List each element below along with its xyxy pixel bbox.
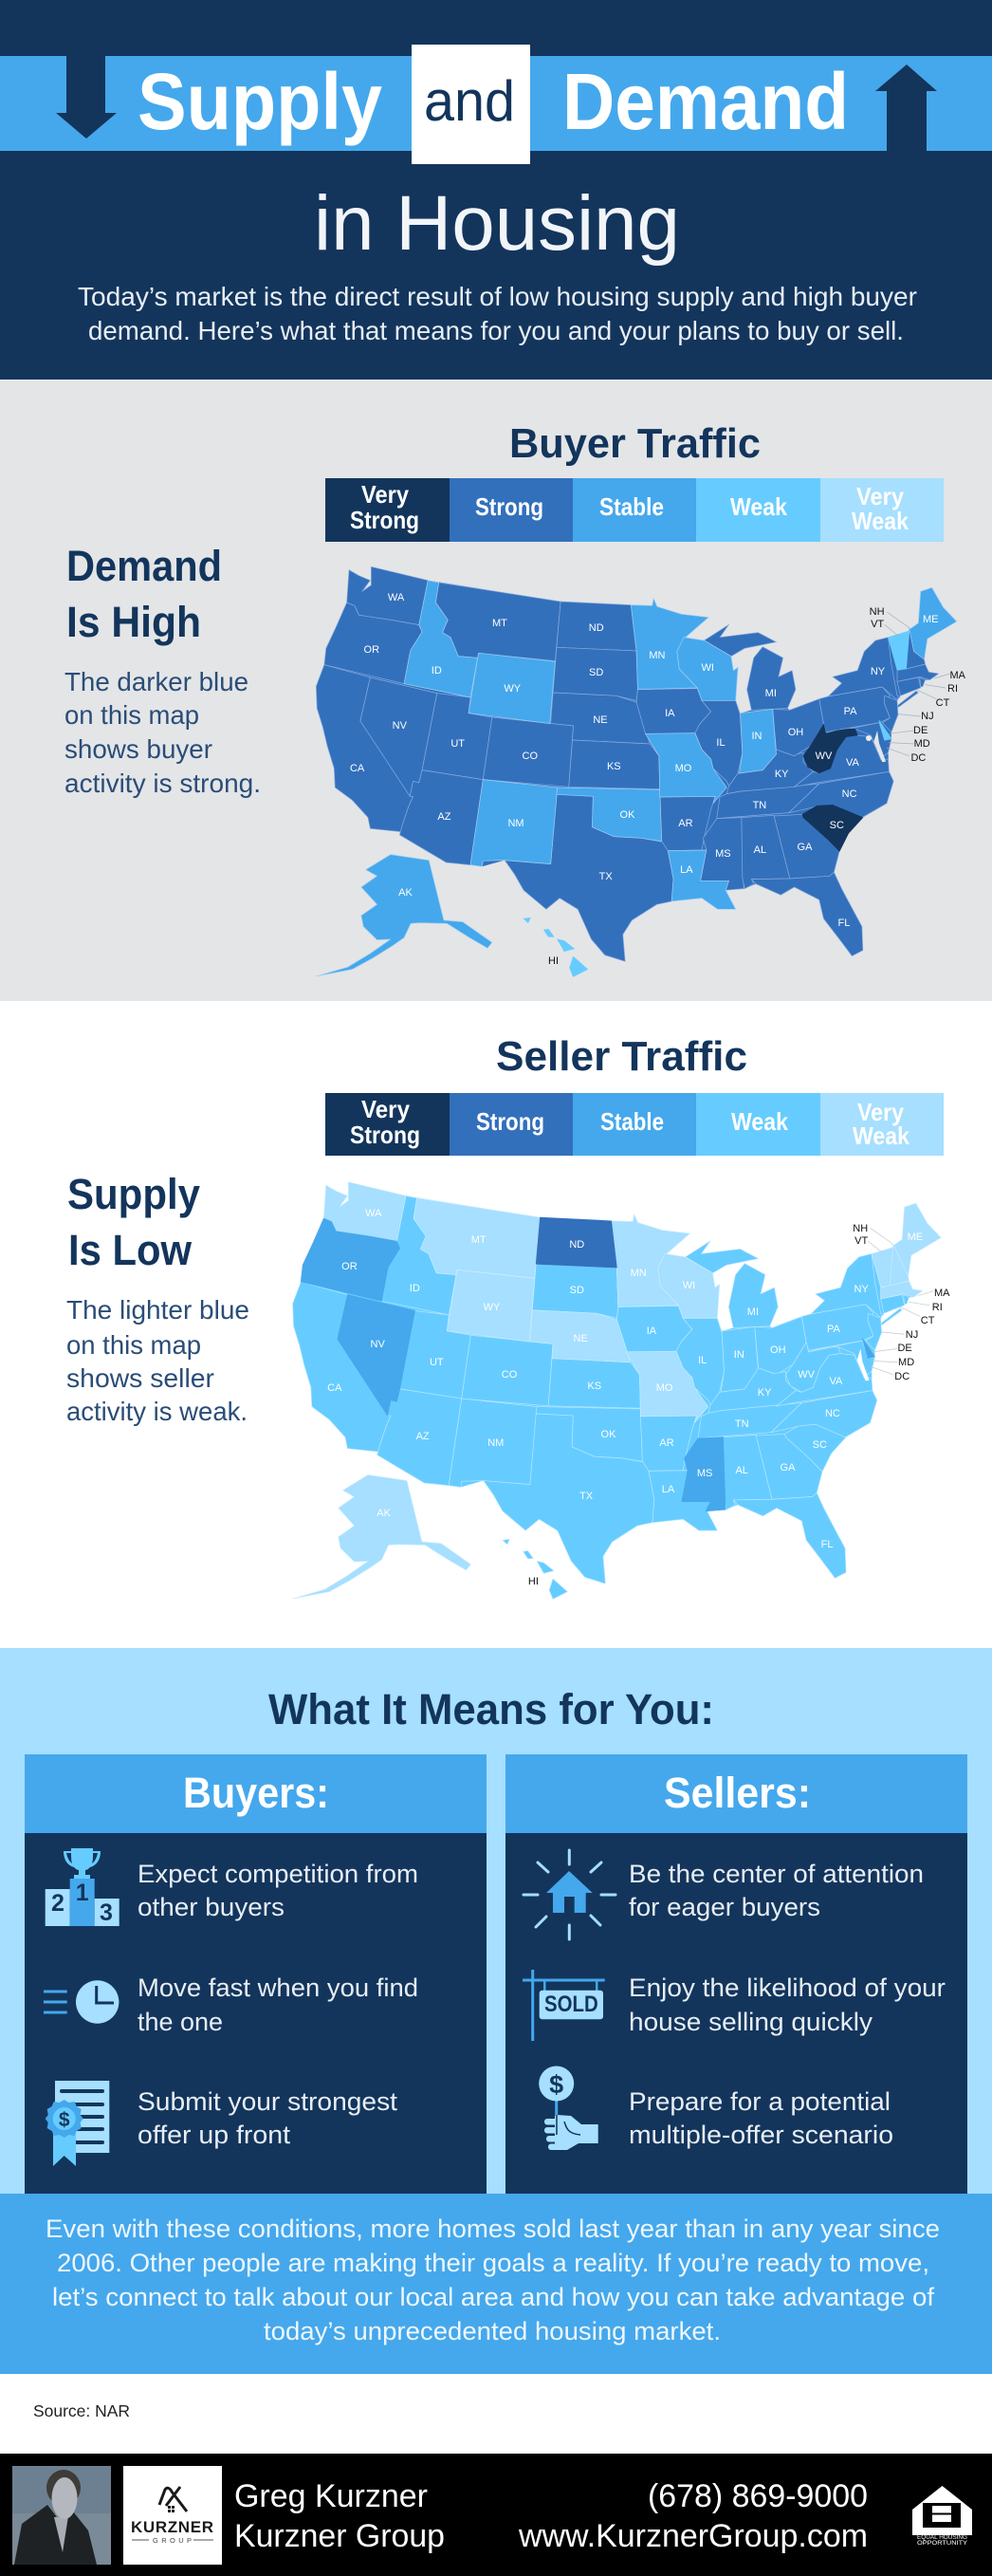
logo wordmark: KURZNER [131, 2518, 213, 2536]
icon: offer document with badge: $ [59, 2109, 70, 2131]
external state labels: seller map: NH [853, 1223, 868, 1234]
icon: trophy on podium: 3 [100, 1900, 113, 1926]
state labels: buyer map: TN [753, 800, 766, 811]
legend: seller traffic [325, 1093, 944, 1156]
agent photo [12, 2466, 111, 2565]
state labels: buyer map: LA [680, 864, 693, 876]
external state labels: seller map: CT [921, 1315, 935, 1326]
state labels: seller map: MN [631, 1268, 647, 1279]
text: buyers item 1 [138, 1860, 418, 1921]
text: demand description [64, 667, 261, 798]
state labels: buyer map: KY [775, 769, 789, 780]
icon: trophy on podium: 1 [76, 1880, 89, 1906]
text: closing paragraph: 2006. Other people are making their goals a reality. If you’re ready to move, [57, 2249, 929, 2277]
title: Supply: Supply [138, 57, 382, 146]
company logo [123, 2466, 222, 2565]
text: sellers item 3: Prepare for a potential [629, 2087, 891, 2116]
panel: buyers [25, 1754, 487, 2194]
legend: seller traffic: Weak [731, 1107, 788, 1136]
heading: Buyers: Buyers: [183, 1769, 329, 1817]
text: supply description [66, 1295, 249, 1426]
title: and: and [424, 69, 515, 133]
state labels: buyer map: MT [492, 618, 507, 629]
external state labels: buyer map [548, 606, 966, 967]
state labels: buyer map: UT [450, 738, 465, 750]
text: buyers item 3 [138, 2087, 398, 2149]
state labels: seller map: SC [813, 1439, 827, 1451]
text: demand description: on this map [64, 700, 199, 730]
state labels: buyer map: FL [837, 917, 850, 929]
state labels: seller map: SD [570, 1285, 584, 1296]
text: sellers item 1: Be the center of attention [629, 1860, 924, 1888]
logo mark [159, 2487, 187, 2511]
state labels: buyer map: AR [678, 818, 693, 829]
text: closing paragraph: let’s connect to talk about our local area and how you can take advantage of [52, 2283, 934, 2311]
state labels: buyer map: WV [816, 751, 833, 762]
state labels: buyer map: MS [715, 848, 731, 860]
company logo: GROUP [153, 2536, 192, 2545]
state labels: seller map: IL [698, 1355, 707, 1366]
state labels: seller map: UT [430, 1357, 444, 1368]
text: buyers item 1: Expect competition from [138, 1860, 418, 1888]
state labels: buyer map: NV [393, 720, 408, 732]
icon: sold sign [523, 1970, 605, 2041]
source note: Source: NAR [33, 2401, 130, 2420]
state labels: seller map: IN [734, 1349, 744, 1361]
state labels: buyer map: IA [665, 708, 675, 719]
state labels: seller map: LA [662, 1484, 675, 1495]
text: sellers item 2 [629, 1974, 946, 2036]
legend: buyer traffic: Very [361, 480, 409, 509]
text: sellers item 1: for eager buyers [629, 1893, 820, 1921]
icon: offer document with badge [46, 2081, 109, 2166]
icon: equal housing opportunity: EQUAL HOUSING [917, 2534, 967, 2541]
text: buyers item 2: Move fast when you find [138, 1974, 418, 2002]
state labels: buyer map: SC [830, 820, 844, 831]
title: in Housing: in Housing [314, 180, 680, 267]
state labels: buyer map: NY [871, 666, 886, 677]
icon: trophy on podium [46, 1848, 119, 1926]
state labels: buyer map [350, 592, 938, 929]
icon: equal housing opportunity: OPPORTUNITY [917, 2540, 968, 2547]
state labels: seller map: NE [574, 1333, 588, 1344]
agent name: Greg Kurzner [234, 2478, 428, 2514]
contact details: (678) 869-9000 [648, 2478, 868, 2514]
icon: hand holding dollar sign [539, 2066, 598, 2150]
state labels: buyer map: MO [675, 763, 692, 774]
state labels: buyer map: OR [364, 644, 379, 656]
state labels: seller map: CA [327, 1382, 342, 1394]
state labels: seller map: AZ [416, 1431, 430, 1442]
legend: seller traffic: Strong [350, 1121, 420, 1149]
state labels: seller map: TX [579, 1491, 594, 1502]
state labels: buyer map: AK [398, 887, 413, 899]
icon: down arrow [56, 56, 117, 139]
state labels: seller map: ND [569, 1239, 584, 1251]
legend: seller traffic: Weak [853, 1121, 909, 1150]
text: demand description: activity is strong. [64, 769, 261, 798]
legend: seller traffic: Very [361, 1095, 410, 1123]
state labels: buyer map: TX [599, 871, 613, 882]
text: closing paragraph: Even with these conditions, more homes sold last year than in any year since [46, 2215, 940, 2243]
header panel [0, 0, 992, 380]
external state labels: seller map: MD [898, 1357, 914, 1368]
state labels: seller map: AL [735, 1465, 748, 1476]
state labels: seller map: TN [735, 1418, 749, 1430]
external state labels: seller map: DC [894, 1371, 909, 1382]
state labels: buyer map: AL [754, 844, 766, 856]
state labels: buyer map: PA [844, 706, 857, 717]
text: sellers item 3 [629, 2087, 893, 2149]
state labels: buyer map: IN [751, 731, 762, 742]
legend: seller traffic: Stable [600, 1107, 664, 1136]
state labels: seller map: MI [747, 1307, 759, 1318]
heading: Supply Is Low: Supply [67, 1170, 200, 1218]
legend: seller traffic: Very [857, 1098, 904, 1126]
contact details [518, 2478, 868, 2554]
external state labels: seller map: NJ [906, 1329, 918, 1341]
state labels: buyer map: IL [716, 737, 726, 749]
external state labels: buyer map: MD [914, 738, 930, 750]
state labels: seller map: ID [410, 1283, 420, 1294]
state labels: seller map: MT [471, 1234, 487, 1246]
state labels: buyer map: VA [846, 757, 859, 769]
state labels: seller map [327, 1208, 923, 1550]
text: sellers item 3: multiple-offer scenario [629, 2121, 893, 2149]
heading: Sellers: Sellers: [664, 1769, 811, 1817]
state labels: buyer map: WA [388, 592, 405, 603]
panel: demand section [0, 380, 992, 1001]
legend: buyer traffic [325, 478, 944, 542]
legend: buyer traffic: Weak [730, 492, 787, 521]
text: closing paragraph [46, 2215, 940, 2345]
intro text: Today’s market is the direct result of low housing supply and high buyer [78, 282, 917, 311]
state labels: buyer map: AZ [437, 811, 451, 823]
text: demand description: shows buyer [64, 734, 212, 764]
text: supply description: on this map [66, 1330, 201, 1360]
agent name [234, 2478, 445, 2554]
state labels: buyer map: CO [523, 751, 538, 762]
panel: what it means for you [0, 1648, 992, 2194]
external state labels: buyer map: DE [913, 725, 928, 736]
state labels: buyer map: WI [701, 662, 714, 674]
heading: Supply Is Low: Is Low [68, 1226, 193, 1274]
state labels: seller map: WY [484, 1302, 501, 1313]
heading: What It Means for You: What It Means for You: [268, 1685, 714, 1733]
state labels: seller map: KY [758, 1387, 772, 1399]
state labels: seller map: OH [770, 1344, 786, 1356]
legend: seller traffic: Strong [476, 1107, 544, 1136]
heading: Demand Is High [66, 542, 222, 646]
state labels: seller map: ME [908, 1232, 923, 1243]
panel: supply section [0, 1001, 992, 1648]
text: closing paragraph: today’s unprecedented housing market. [264, 2317, 721, 2345]
state labels: buyer map: ME [923, 614, 938, 625]
panel: sellers [505, 1754, 967, 2194]
legend: buyer traffic: Strong [475, 492, 543, 521]
legend: buyer traffic: Strong [350, 506, 419, 534]
text: supply description: shows seller [66, 1363, 214, 1393]
state labels: seller map: IA [647, 1325, 657, 1337]
text: demand description: The darker blue [64, 667, 248, 696]
state labels: seller map: GA [781, 1462, 796, 1473]
text: buyers item 1: other buyers [138, 1893, 285, 1921]
state labels: buyer map: CA [350, 763, 365, 774]
heading: Demand Is High: Is High [66, 598, 201, 646]
text: sellers item 2: Enjoy the likelihood of your [629, 1974, 946, 2002]
text: buyers item 3: offer up front [138, 2121, 291, 2149]
external state labels: buyer map: DC [910, 752, 926, 764]
state labels: buyer map: KS [607, 761, 621, 772]
state labels: buyer map: WY [504, 683, 522, 695]
state labels: seller map: KS [587, 1381, 601, 1392]
heading: Demand Is High: Demand [66, 542, 222, 590]
icon: hand holding dollar sign: $ [549, 2070, 563, 2099]
state labels: seller map: NY [854, 1284, 870, 1295]
state labels: buyer map: NM [507, 818, 524, 829]
title band [0, 56, 992, 151]
external state labels: seller map: VT [854, 1235, 869, 1247]
state labels: seller map: WV [798, 1369, 816, 1381]
icon: sold sign: SOLD [544, 1992, 598, 2017]
icon: clock [44, 1980, 119, 2024]
external state labels: seller map [528, 1223, 950, 1587]
external state labels: seller map: MA [934, 1288, 950, 1299]
state labels: seller map: VA [829, 1376, 843, 1387]
state labels: seller map: AR [659, 1437, 674, 1449]
icon: up arrow [875, 65, 937, 151]
external state labels: seller map: RI [932, 1302, 943, 1313]
external state labels: buyer map: CT [936, 697, 950, 709]
state labels: seller map: WI [683, 1280, 695, 1291]
text: buyers item 2: the one [138, 2008, 223, 2036]
state labels: seller map: NV [371, 1339, 386, 1350]
contact details: www.KurznerGroup.com [518, 2518, 868, 2554]
agent name: Kurzner Group [234, 2518, 445, 2554]
text: sellers item 2: house selling quickly [629, 2008, 873, 2036]
state labels: seller map: MO [656, 1382, 673, 1394]
state labels: seller map: OK [601, 1429, 616, 1440]
text: sellers item 1 [629, 1860, 924, 1921]
external state labels: buyer map: RI [947, 683, 958, 695]
panel: closing message [0, 2194, 992, 2374]
legend: buyer traffic: Very [856, 482, 904, 510]
legend: buyer traffic: Weak [852, 507, 909, 535]
panel: footer [0, 2454, 992, 2576]
icon: house with rays [524, 1850, 615, 1939]
state labels: buyer map: MN [649, 650, 666, 661]
state labels: seller map: FL [821, 1539, 834, 1550]
title: Demand: Demand [562, 57, 849, 146]
external state labels: seller map: HI [528, 1576, 539, 1587]
legend: buyer traffic: Stable [599, 492, 664, 521]
state labels: seller map: OR [341, 1261, 358, 1272]
external state labels: buyer map: MA [949, 670, 966, 681]
intro text: demand. Here’s what that means for you and your plans to buy or sell. [88, 316, 904, 345]
state labels: buyer map: OK [620, 809, 635, 821]
map: buyer traffic by state [316, 566, 966, 976]
state labels: seller map: NM [487, 1437, 504, 1449]
icon: equal housing opportunity [912, 2486, 972, 2547]
map: seller traffic by state [293, 1182, 950, 1599]
text: supply description: activity is weak. [66, 1397, 248, 1426]
heading: Buyer Traffic: Buyer Traffic [509, 420, 761, 467]
intro text [78, 282, 917, 345]
heading: Seller Traffic: Seller Traffic [496, 1033, 747, 1080]
white title box [412, 45, 530, 164]
state labels: seller map: MS [697, 1468, 712, 1479]
state labels: buyer map: GA [798, 842, 813, 853]
icon: trophy on podium: 2 [51, 1890, 64, 1917]
state labels: buyer map: NE [593, 714, 608, 726]
state labels: seller map: NC [825, 1408, 840, 1419]
heading: Supply Is Low [67, 1170, 200, 1274]
state labels: seller map: WA [365, 1208, 382, 1219]
external state labels: buyer map: NH [870, 606, 885, 618]
state labels: buyer map: ID [432, 665, 442, 676]
state labels: buyer map: OH [788, 727, 803, 738]
state labels: buyer map: SD [589, 667, 603, 678]
state labels: seller map: PA [827, 1324, 840, 1335]
external state labels: buyer map: NJ [921, 711, 934, 722]
state labels: buyer map: NC [842, 788, 857, 800]
state labels: seller map: AK [377, 1508, 392, 1519]
state labels: seller map: CO [502, 1369, 518, 1381]
state labels: buyer map: MI [765, 688, 777, 699]
text: buyers item 3: Submit your strongest [138, 2087, 398, 2116]
text: supply description: The lighter blue [66, 1295, 249, 1325]
external state labels: seller map: DE [897, 1343, 912, 1354]
external state labels: buyer map: HI [548, 955, 559, 967]
external state labels: buyer map: VT [871, 619, 884, 630]
state labels: buyer map: ND [589, 622, 604, 634]
text: buyers item 2 [138, 1974, 418, 2036]
